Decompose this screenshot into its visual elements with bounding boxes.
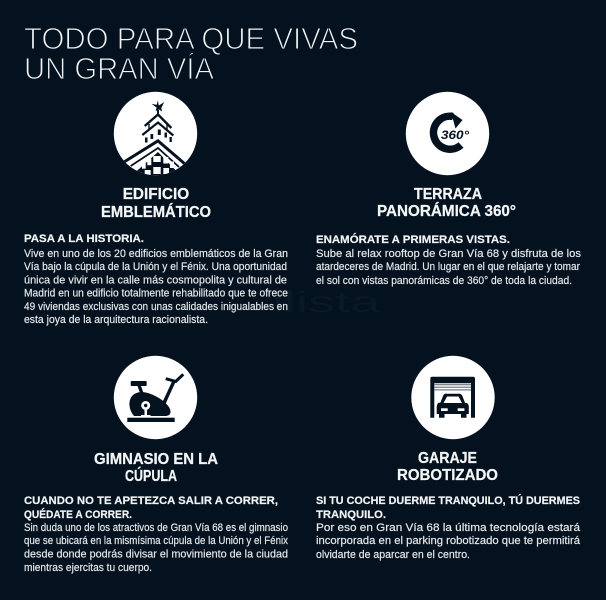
heading [377, 186, 516, 220]
title [24, 21, 358, 86]
text block: incorporada en el parking robotizado que te permitirá [316, 535, 581, 547]
text block: QUÉDATE A CORRER. [24, 508, 132, 521]
heading: GARAJE [418, 450, 477, 467]
text block: Por eso en Gran Vía 68 la última tecnología estará [316, 522, 581, 534]
icon: exercise bike [114, 356, 197, 439]
heading [94, 451, 218, 485]
text block: 49 viviendas exclusivas con unas calidades inigualables en [24, 301, 288, 313]
heading: GIMNASIO EN LA [94, 451, 218, 468]
text block: mientras ejercitas tu cuerpo. [24, 562, 152, 574]
heading: EDIFICIO [123, 186, 189, 203]
text block: ENAMÓRATE A PRIMERAS VISTAS. [316, 233, 510, 246]
heading: TERRAZA [414, 186, 482, 203]
heading: EMBLEMÁTICO [101, 204, 211, 221]
title: UN GRAN VÍA [24, 51, 214, 86]
text block: que se ubicará en la mismísima cúpula de la Unión y el Fénix [24, 535, 288, 547]
heading: CÚPULA [125, 467, 177, 485]
panel: terraza panorámica [316, 92, 582, 287]
text block [24, 495, 288, 574]
text block: desde donde podrás divisar el movimiento de la ciudad [24, 548, 288, 560]
panel: edificio emblemático [24, 92, 288, 326]
panel: gimnasio en la cúpula [24, 356, 288, 574]
text block: esta joya de la arquitectura racionalista. [24, 314, 208, 326]
text block: atardeceres de Madrid. Un lugar en el que relajarte y tomar [316, 261, 580, 273]
icon: 360 rotation: 360° [441, 130, 469, 142]
text block: PASA A LA HISTORIA. [24, 233, 144, 245]
text block: el sol con vistas panorámicas de 360° de toda la ciudad. [316, 275, 572, 287]
heading [101, 186, 211, 221]
text block: CUANDO NO TE APETEZCA SALIR A CORRER, [24, 495, 278, 507]
icon: 360 rotation [406, 92, 489, 175]
text block: Vía bajo la cúpula de la Unión y el Fénix. Una oportunidad [24, 261, 287, 273]
text block: Vive en uno de los 20 edificios emblemáticos de la Gran [24, 248, 288, 260]
text block: TRANQUILO. [316, 509, 386, 521]
text block: Madrid en un edificio totalmente rehabilitado que te ofrece [24, 288, 288, 300]
heading: ROBOTIZADO [397, 467, 498, 484]
icon: historic building [114, 92, 197, 180]
text block: Sin duda uno de los atractivos de Gran Vía 68 es el gimnasio [24, 522, 288, 534]
heading [397, 450, 498, 484]
heading: PANORÁMICA 360° [377, 203, 516, 220]
panel: garaje robotizado [316, 356, 581, 561]
text block: SI TU COCHE DUERME TRANQUILO, TÚ DUERMES [316, 494, 580, 507]
title: TODO PARA QUE VIVAS [24, 21, 358, 56]
icon: garage with car [411, 356, 495, 439]
text block: Sube al relax rooftop de Gran Vía 68 y disfruta de los [316, 248, 582, 260]
text block: única de vivir en la calle más cosmopolita y cultural de [24, 274, 287, 286]
text block [316, 233, 582, 287]
infographic canvas: ilista [272, 286, 381, 319]
text block [24, 233, 288, 326]
text block: olvidarte de aparcar en el centro. [316, 549, 470, 561]
text block [316, 494, 581, 561]
